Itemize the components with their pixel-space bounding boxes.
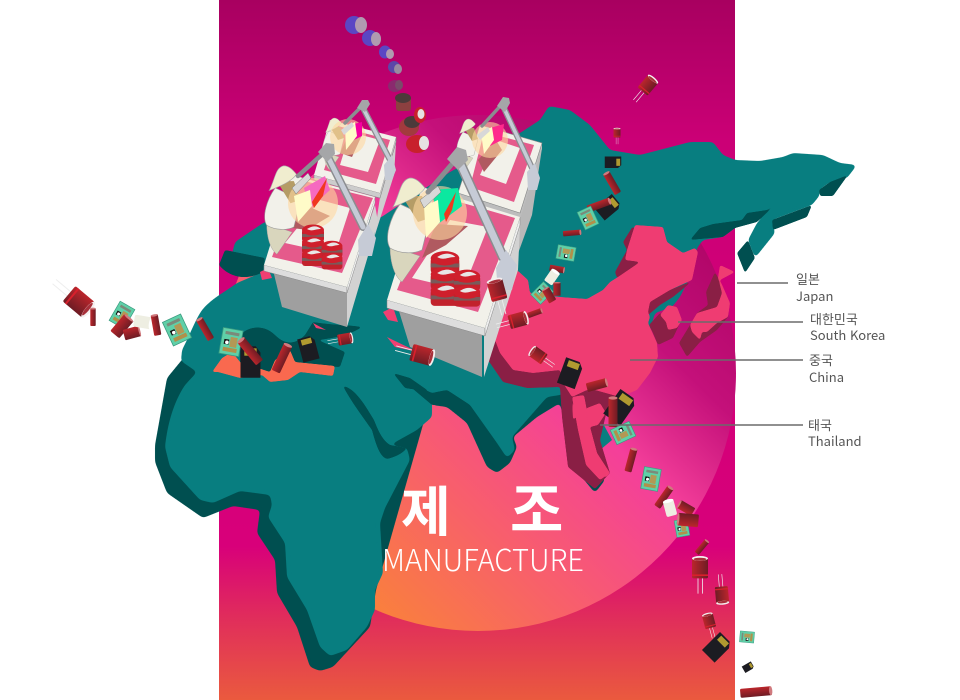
device glow: back left [330, 119, 366, 155]
components stream: centre [486, 73, 659, 371]
falling capacitor rings [345, 16, 429, 153]
Persian Gulf shadow [400, 378, 507, 470]
label: China: China [809, 367, 844, 386]
label: China: 중국 [809, 350, 833, 369]
title: Korean: 조 [510, 464, 563, 548]
panel: gradient background [219, 0, 735, 700]
callout line: South Korea [678, 321, 803, 323]
China and Southeast Asia shadow [488, 340, 625, 489]
title: Korean: 제 [401, 468, 451, 547]
components stream: left [48, 274, 437, 378]
title: English: MANUFACTURE [382, 536, 584, 580]
north China shadow [615, 226, 640, 278]
callout line: Thailand [600, 424, 803, 426]
worker: front right [388, 178, 430, 282]
worker: back right [457, 119, 478, 171]
table: back left [314, 120, 396, 238]
callout line: Japan [737, 282, 788, 284]
label: Thailand: Thailand [808, 431, 862, 450]
Japan [690, 265, 735, 340]
label: Japan: Japan [796, 286, 833, 305]
Thailand gulf teal [594, 418, 612, 450]
map: land masses [155, 106, 857, 671]
Korea [660, 305, 682, 330]
gradient sun disc [220, 115, 736, 631]
capacitor stack: front left [302, 224, 342, 269]
northeast China shadow [640, 281, 692, 316]
label: South Korea: South Korea [810, 325, 885, 344]
China and Southeast Asia [495, 225, 698, 478]
capacitor stack: front right [431, 251, 480, 307]
Korea shadow [649, 313, 680, 345]
table: front left [264, 175, 378, 327]
Africa, Europe and Asia [165, 106, 857, 656]
Mediterranean shadow [240, 322, 362, 375]
label: Thailand: 태국 [808, 415, 832, 434]
worker: back left [323, 118, 344, 170]
Europe shadow [219, 250, 265, 277]
device glow: back right [472, 122, 508, 158]
far east shadow bands [690, 175, 848, 273]
label: South Korea: 대한민국 [810, 309, 858, 328]
device glow: front left [288, 173, 338, 228]
robot arms [298, 97, 540, 290]
callout line: China [630, 359, 803, 361]
Japan shadow [679, 272, 728, 357]
label: Japan: 일본 [796, 269, 820, 288]
Mediterranean water [212, 350, 335, 382]
land shadow [155, 350, 605, 671]
worker: front left [265, 166, 301, 254]
small seas [260, 268, 418, 352]
components stream: southeast [557, 357, 773, 698]
device glow: front right [413, 186, 467, 240]
table: back right [458, 125, 542, 270]
table: front right [387, 187, 520, 377]
Indochina peninsula [572, 395, 610, 480]
Caspian shadow [393, 373, 430, 392]
Red Sea [343, 386, 407, 459]
